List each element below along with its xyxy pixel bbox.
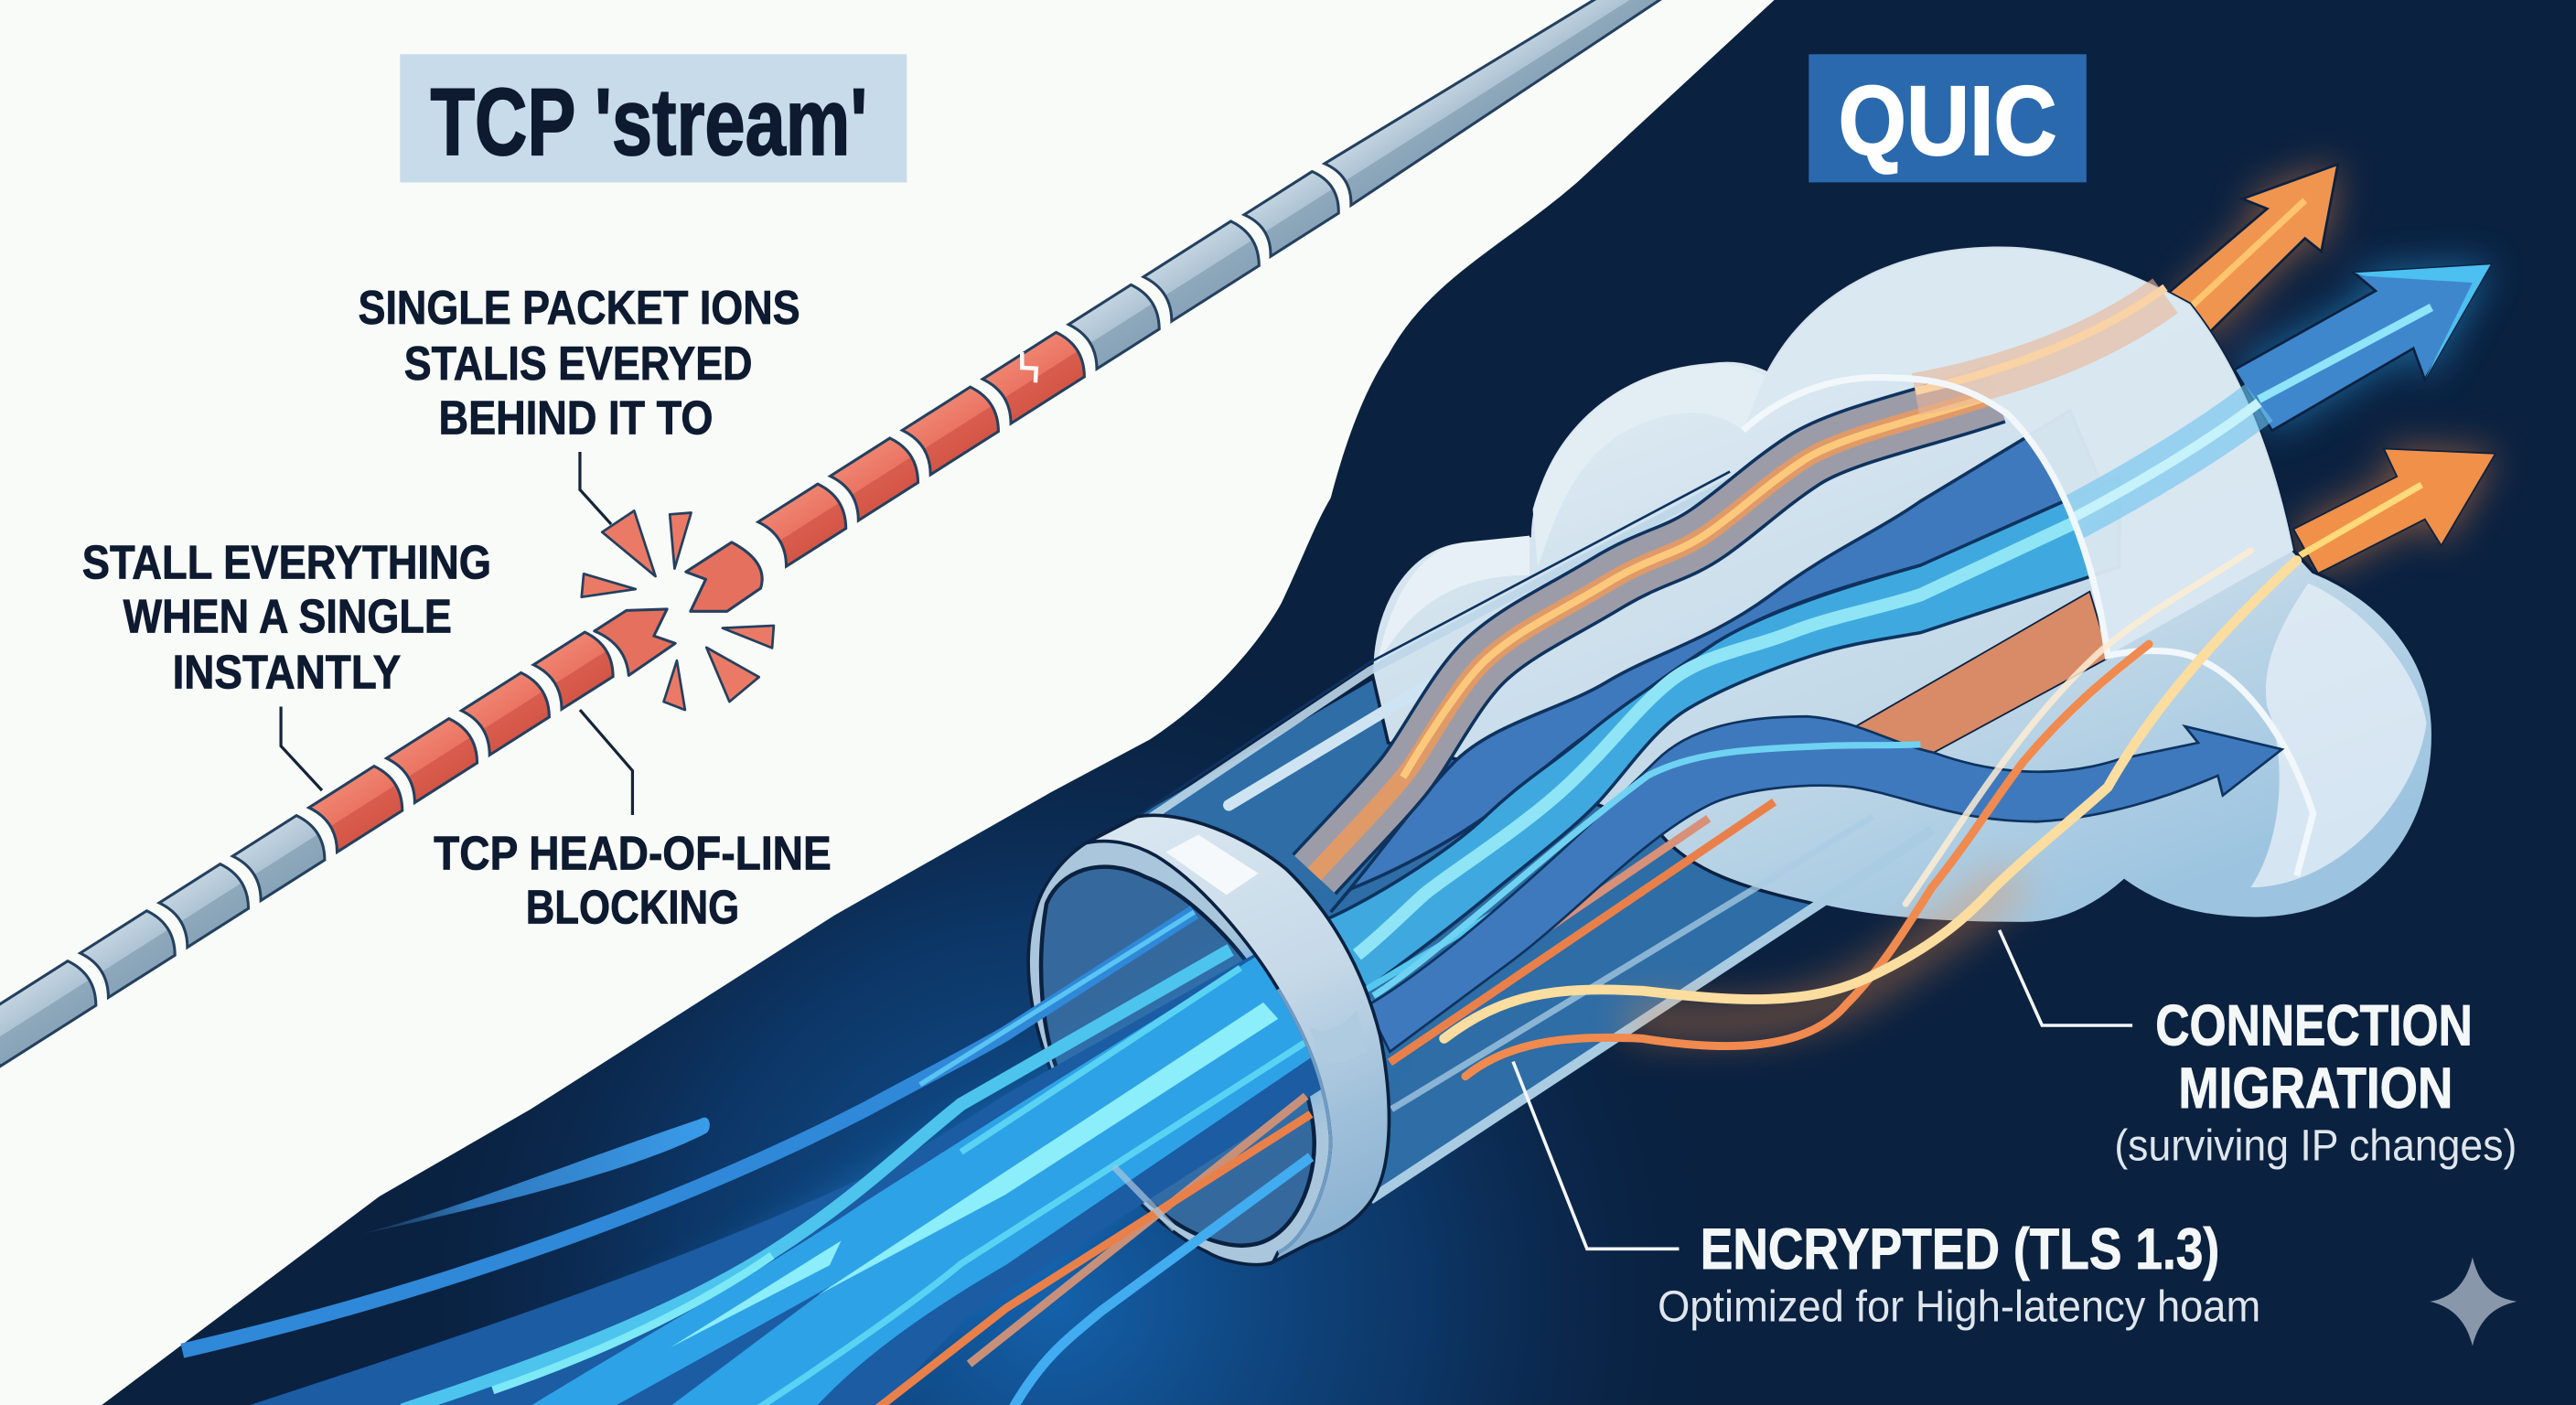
- ring front band: [1086, 815, 1389, 1262]
- gray packets after the loss: [1068, 0, 1691, 369]
- leader lines: QUIC callouts: [1513, 930, 2132, 1249]
- broken packets at the loss point: [595, 542, 762, 675]
- icon: sparkle mark: [2430, 1257, 2517, 1346]
- lower blue stream: [1012, 1157, 1311, 1405]
- callout: connection migration: [2114, 994, 2517, 1170]
- thin cyan stream: [756, 1042, 1306, 1405]
- callout: stall everything: STALL EVERYTHING: [82, 536, 491, 589]
- orange line: [875, 1114, 1311, 1405]
- migrating light lines: [1444, 551, 2297, 1077]
- callout: connection migration: (surviving IP changes): [2114, 1121, 2517, 1170]
- orange band to lower right arrow: [1841, 592, 2109, 753]
- callout: TCP head-of-line blocking: BLOCKING: [526, 882, 739, 935]
- dark wedge between streams: [607, 1287, 830, 1405]
- callout: single packet loss: STALIS EVERYED: [404, 338, 753, 391]
- crack in red packet: [1015, 350, 1043, 384]
- heading: QUIC: QUIC: [1839, 65, 2056, 176]
- callout: encrypted TLS 1.3: ENCRYPTED (TLS 1.3): [1701, 1217, 2219, 1282]
- callout: encrypted TLS 1.3: [1658, 1217, 2260, 1331]
- callout: TCP head-of-line blocking: [434, 827, 832, 935]
- callout: encrypted TLS 1.3: Optimized for High-latency hoam: [1658, 1282, 2260, 1331]
- callout: stall everything: [82, 536, 491, 700]
- callout: connection migration: CONNECTION: [2155, 994, 2473, 1058]
- wave band: dark blue: [1331, 411, 2120, 912]
- arrow: wavy blue stream into cloud: [1367, 716, 2282, 1052]
- icon: packet burst shards: [582, 510, 774, 710]
- long blue stream: [182, 912, 1195, 1351]
- wide dark blue stream: [235, 920, 1380, 1405]
- main bright stream: [524, 920, 1380, 1405]
- cyan stream: [402, 949, 1230, 1405]
- wave band: orange over blue: [1315, 394, 1996, 874]
- cloud front face: [1743, 246, 2313, 876]
- callout: connection migration: MIGRATION: [2178, 1056, 2453, 1121]
- arrows: QUIC streams leaving the cloud: [2155, 165, 2496, 574]
- stream glow: [427, 920, 1380, 1405]
- chart: TCP packet stream: [0, 0, 1691, 1067]
- gray packets before the loss: [0, 811, 331, 1067]
- callout: stall everything: WHEN A SINGLE: [123, 591, 452, 644]
- faded orange line: [970, 1096, 1306, 1364]
- leader lines: TCP callouts: [281, 452, 632, 815]
- red stalled packets: [309, 328, 1091, 852]
- bright core stream: [818, 1003, 1278, 1295]
- tube lower streams: [1367, 796, 1775, 1062]
- stream bands flowing out of the ring: [182, 912, 1380, 1405]
- icon: cloud: [1372, 246, 2433, 924]
- callout: single packet loss: BEHIND IT TO: [439, 391, 713, 445]
- callout: single packet loss: SINGLE PACKET IONS: [359, 282, 800, 335]
- cloud lobe highlights: [1377, 364, 2427, 887]
- heading: TCP stream: TCP 'stream': [431, 70, 867, 176]
- rear rim crossing streams: [1114, 1167, 1175, 1229]
- tube glass edges: [1137, 472, 1932, 1199]
- callout: stall everything: INSTANTLY: [173, 647, 401, 700]
- ring back rim and opening: [1028, 815, 1389, 1265]
- wave band: cyan: [1325, 477, 2120, 989]
- short fading stream: [361, 1118, 710, 1234]
- callout: single packet loss: [359, 282, 800, 445]
- heading: TCP stream: [400, 54, 907, 182]
- callout: TCP head-of-line blocking: TCP HEAD-OF-LINE: [434, 827, 832, 880]
- panel: tube body: [1137, 381, 2108, 1199]
